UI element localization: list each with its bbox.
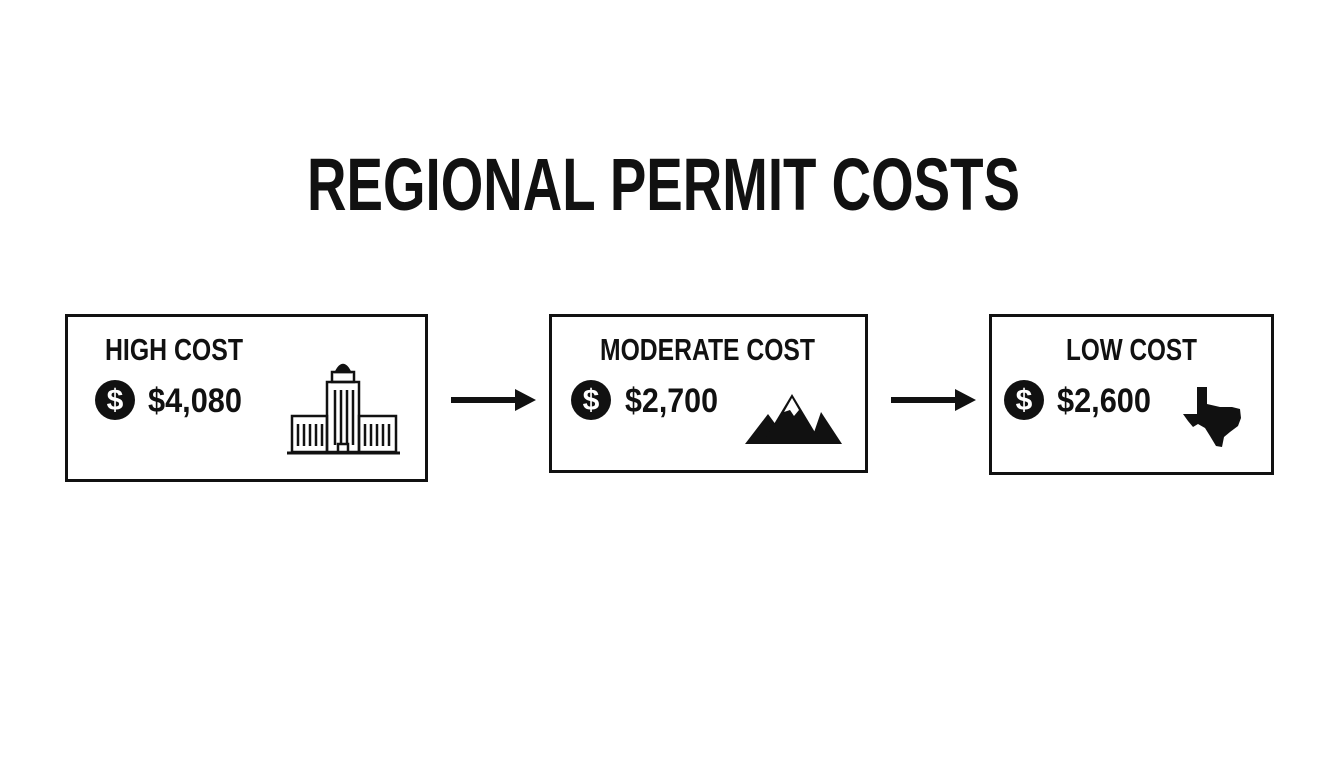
price: $2,700 xyxy=(625,382,718,420)
title: REGIONAL PERMIT COSTS xyxy=(307,143,1020,226)
icon: mountains xyxy=(745,394,842,444)
icon: dollar: $ xyxy=(107,384,124,417)
panel: moderate cost xyxy=(550,316,866,472)
icon: texas xyxy=(1183,387,1241,447)
icon: dollar: $ xyxy=(583,384,600,417)
arrow 1 xyxy=(451,389,536,411)
icon: dollar: $ xyxy=(1016,384,1033,417)
heading: low cost: LOW COST xyxy=(1066,332,1197,367)
price: $2,600 xyxy=(1057,382,1151,420)
price: $4,080 xyxy=(148,382,242,420)
arrow 2 xyxy=(891,389,976,411)
icon: dollar xyxy=(95,380,135,420)
icon: dollar xyxy=(571,380,611,420)
heading: moderate cost: MODERATE COST xyxy=(600,332,815,367)
heading: high cost: HIGH COST xyxy=(105,332,243,367)
icon: city hall xyxy=(287,365,400,453)
icon: dollar xyxy=(1004,380,1044,420)
panel: high cost xyxy=(66,316,426,480)
panel: low cost xyxy=(990,316,1272,474)
